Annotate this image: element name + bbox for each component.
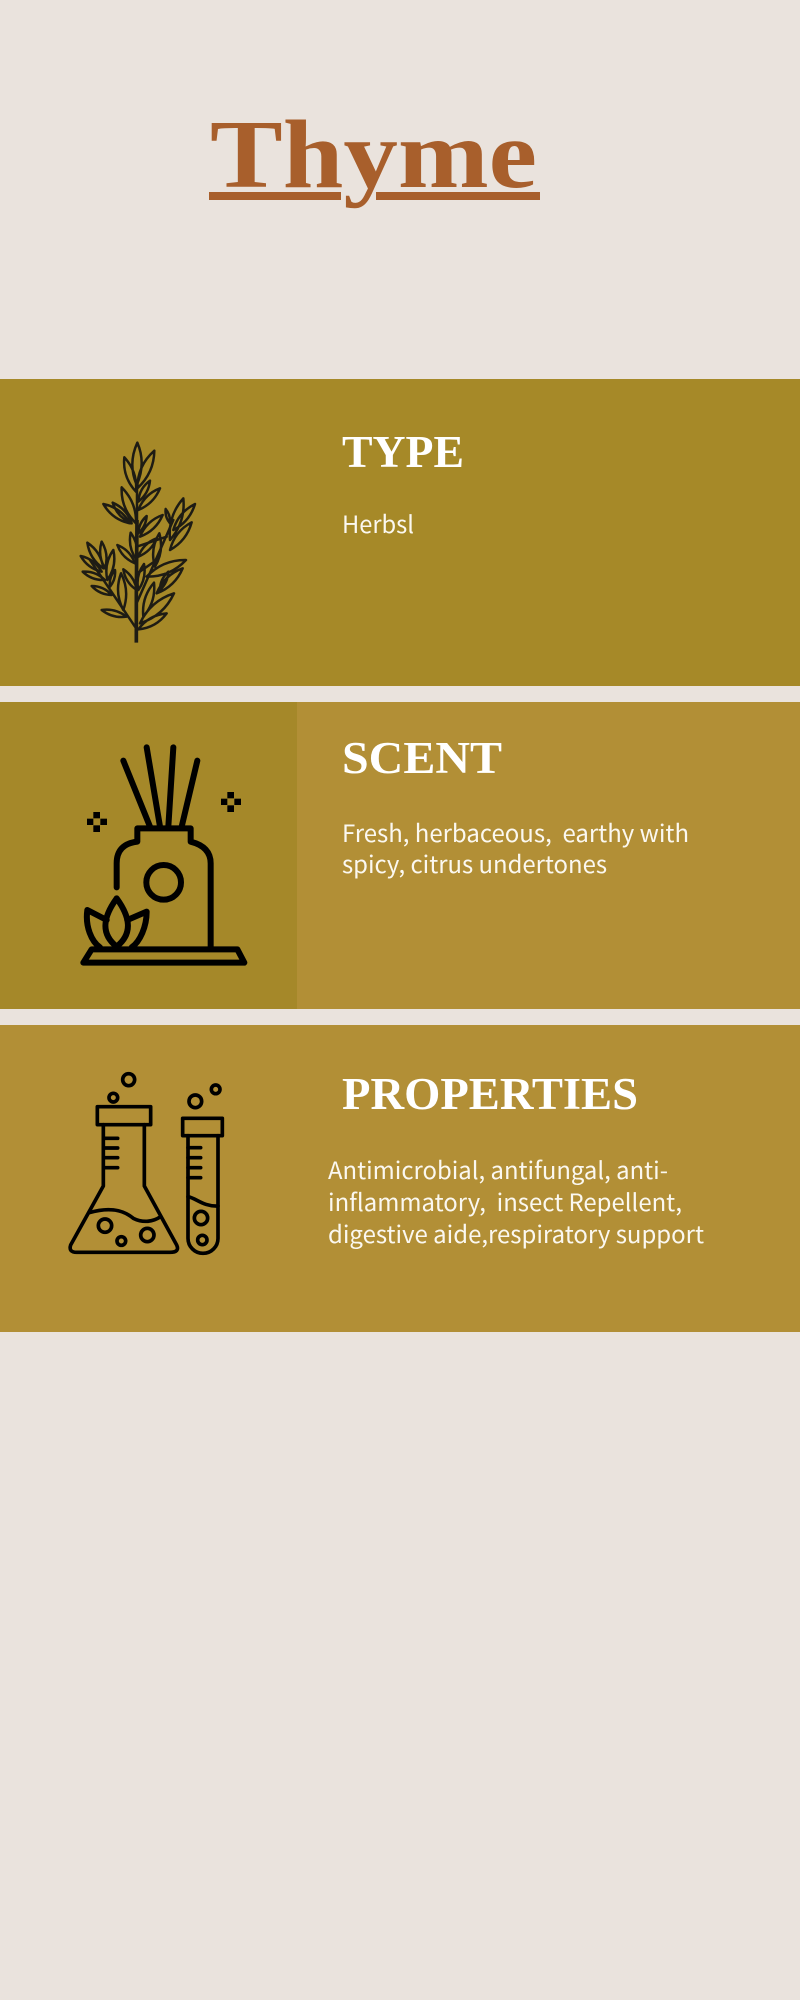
panel: type: [0, 379, 800, 686]
text: scent: Fresh, herbaceous, earthy with: [342, 814, 689, 849]
icon: reed diffuser: [83, 747, 244, 963]
text: scent: spicy, citrus undertones: [342, 845, 607, 880]
panel: scent: [0, 702, 800, 1009]
text: type: Herbsl: [342, 505, 414, 540]
text: properties: [328, 1151, 704, 1250]
panel: properties: [0, 1025, 800, 1332]
text: properties: digestive aide,respiratory support: [328, 1215, 704, 1250]
heading: properties: PROPERTIES: [342, 1069, 638, 1119]
text: properties: inflammatory, insect Repellent,: [328, 1183, 682, 1218]
heading: type: TYPE: [342, 427, 464, 477]
icon: lab flask and test tube: [70, 1074, 222, 1253]
title: Thyme: [210, 101, 537, 209]
text: properties: Antimicrobial, antifungal, anti-: [328, 1151, 668, 1186]
heading: scent: SCENT: [342, 733, 502, 783]
icon: thyme sprig: [81, 443, 195, 643]
text: scent: [342, 814, 689, 880]
